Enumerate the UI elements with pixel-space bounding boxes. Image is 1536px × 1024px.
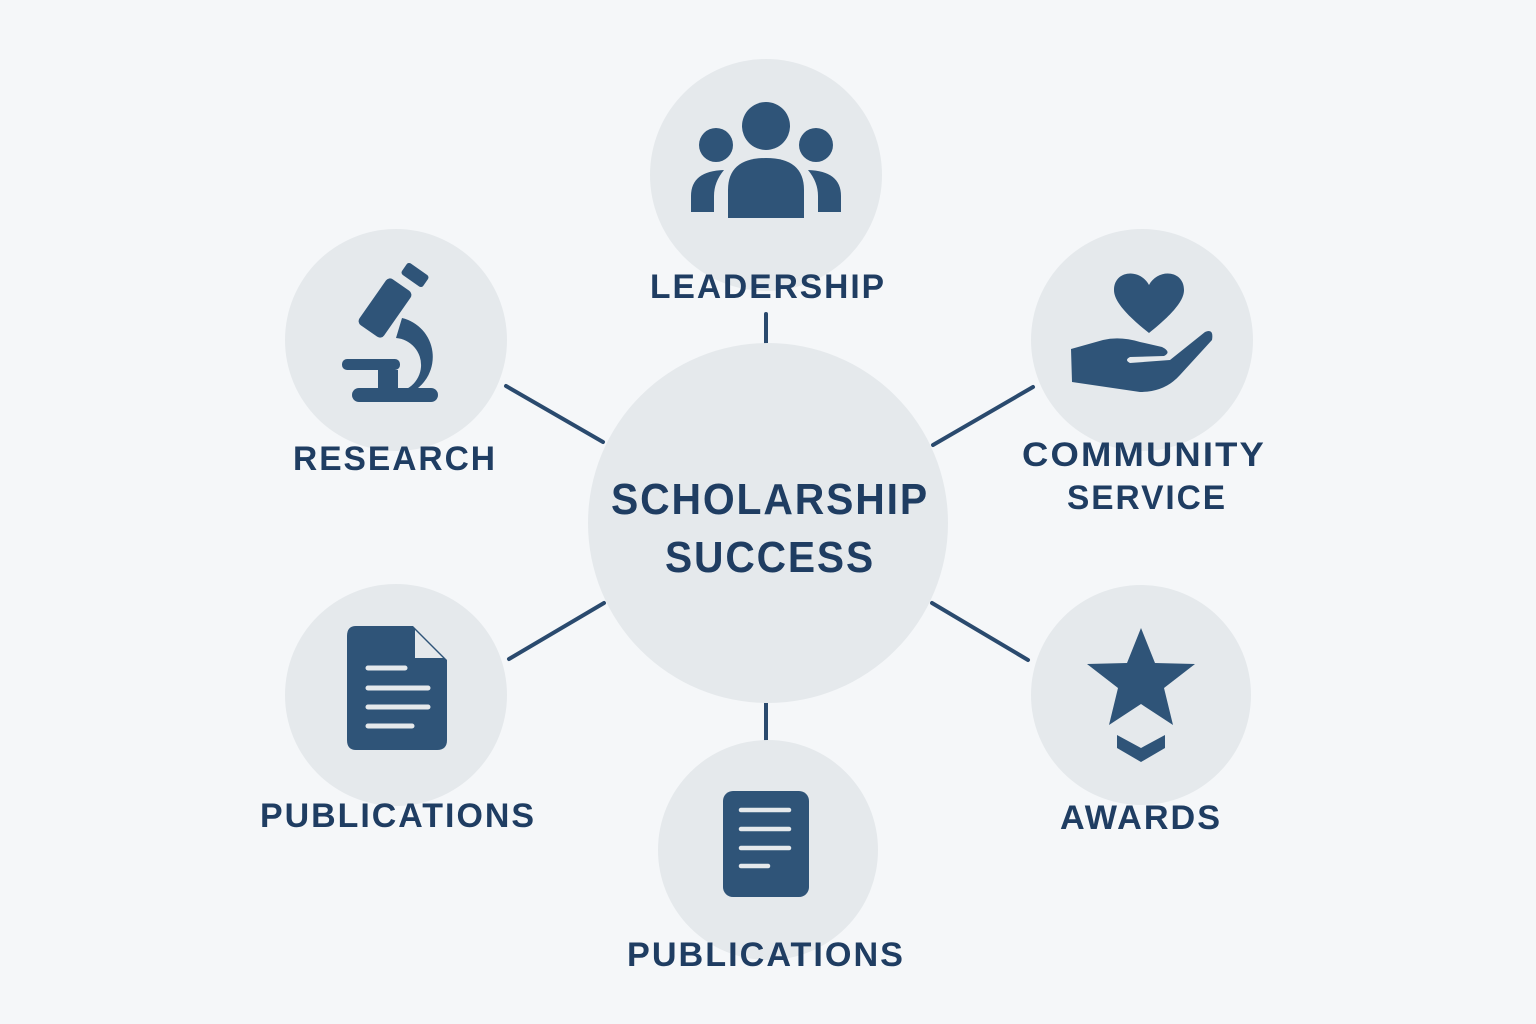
center title: SCHOLARSHIP: [611, 475, 929, 524]
panel: publications bottom: [627, 740, 905, 974]
label: community service: SERVICE: [1067, 479, 1227, 517]
icon: document lines: [723, 791, 809, 897]
icon: people: [691, 102, 841, 218]
label: community service: COMMUNITY: [1022, 436, 1266, 474]
panel: awards: [1031, 585, 1251, 837]
label: leadership: LEADERSHIP: [650, 268, 886, 306]
label: community service: [1022, 436, 1266, 517]
panel: community service: [1022, 229, 1266, 517]
label: publications left: PUBLICATIONS: [260, 797, 536, 835]
icon: microscope: [342, 262, 438, 402]
panel: publications left: [260, 584, 536, 835]
panel: research: [285, 229, 507, 478]
panel: center: [588, 343, 948, 703]
label: research: RESEARCH: [293, 440, 497, 478]
icon: star ribbon: [1087, 628, 1195, 762]
label: publications bottom: PUBLICATIONS: [627, 936, 905, 974]
label: awards: AWARDS: [1060, 799, 1222, 837]
icon: heart in hand: [1071, 274, 1212, 392]
connector lines: [506, 314, 1033, 740]
center title: SUCCESS: [665, 533, 875, 582]
panel: leadership: [650, 59, 886, 306]
center title: [611, 475, 929, 582]
icon: document: [347, 626, 447, 750]
